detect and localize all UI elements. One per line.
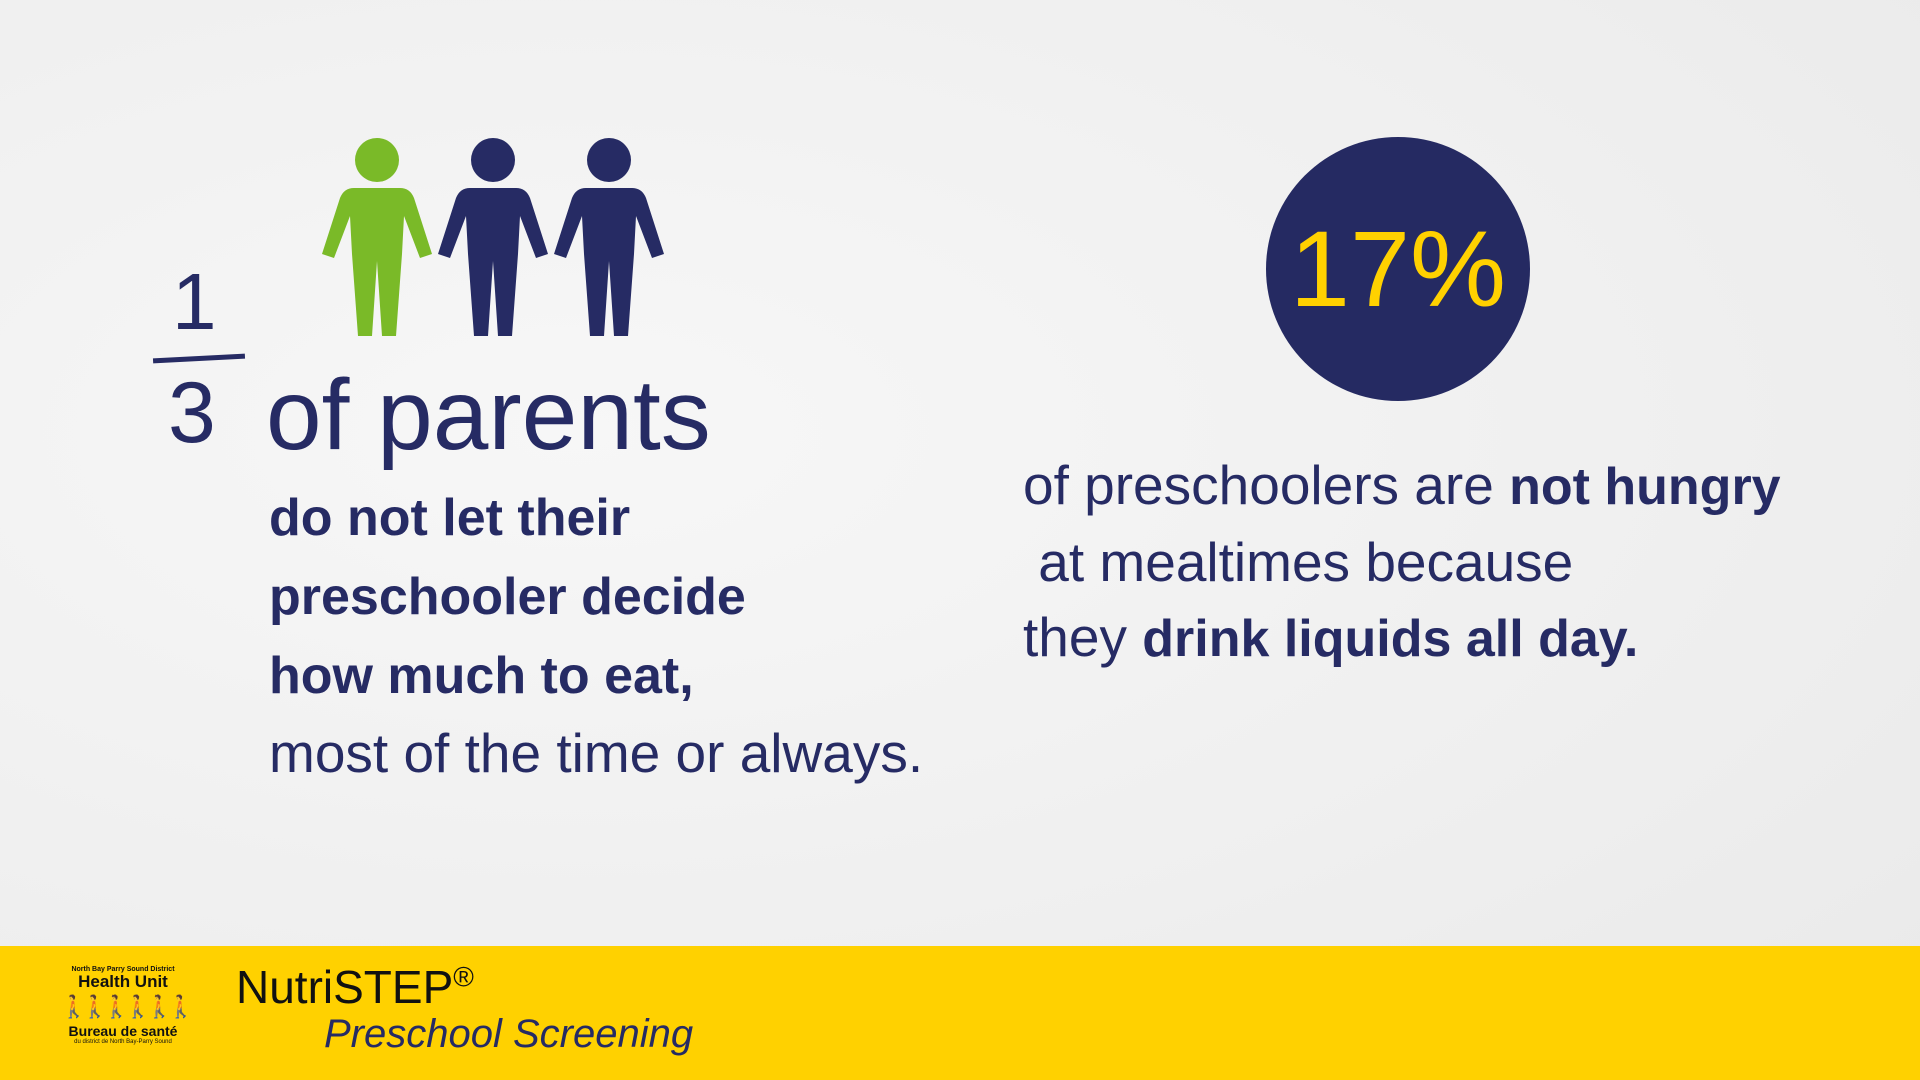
fraction 1/3: 3 [168, 365, 216, 461]
icon: navy person [438, 138, 548, 336]
people icons [322, 138, 664, 336]
logo: health unit: 🚶🚶🚶🚶🚶🚶 [60, 994, 188, 1019]
logo: health unit: North Bay Parry Sound District [71, 966, 175, 973]
fraction 1/3 [152, 257, 246, 461]
text block: right statement: they drink liquids all day. [1023, 606, 1638, 668]
text block: left statement: most of the time or always. [269, 722, 923, 784]
logo: health unit: Bureau de santé [69, 1023, 177, 1039]
subtitle: Preschool Screening: Preschool Screening [324, 1012, 693, 1056]
footer bar [0, 946, 1920, 1080]
text block: right statement: at mealtimes because [1038, 531, 1573, 593]
icon: navy person [554, 138, 664, 336]
circle: 17%: 17% [1290, 208, 1506, 329]
text block: right statement [1023, 454, 1781, 668]
text block: left statement: do not let their [269, 489, 630, 547]
text block: left statement: how much to eat, [269, 647, 694, 705]
heading: of parents: of parents [266, 359, 711, 471]
text block: left statement: preschooler decide [269, 568, 746, 626]
fraction 1/3: 1 [172, 257, 216, 346]
logo: health unit: du district de North Bay-Parry Sound [74, 1039, 172, 1045]
circle: 17% [1266, 137, 1530, 401]
brand: NutriSTEP: NutriSTEP® [236, 961, 474, 1013]
logo: health unit [60, 966, 188, 1045]
logo: health unit: Health Unit [78, 972, 168, 991]
icon: green person [322, 138, 432, 336]
text block: left statement [269, 489, 923, 784]
text block: right statement: of preschoolers are not hungry [1023, 454, 1781, 516]
